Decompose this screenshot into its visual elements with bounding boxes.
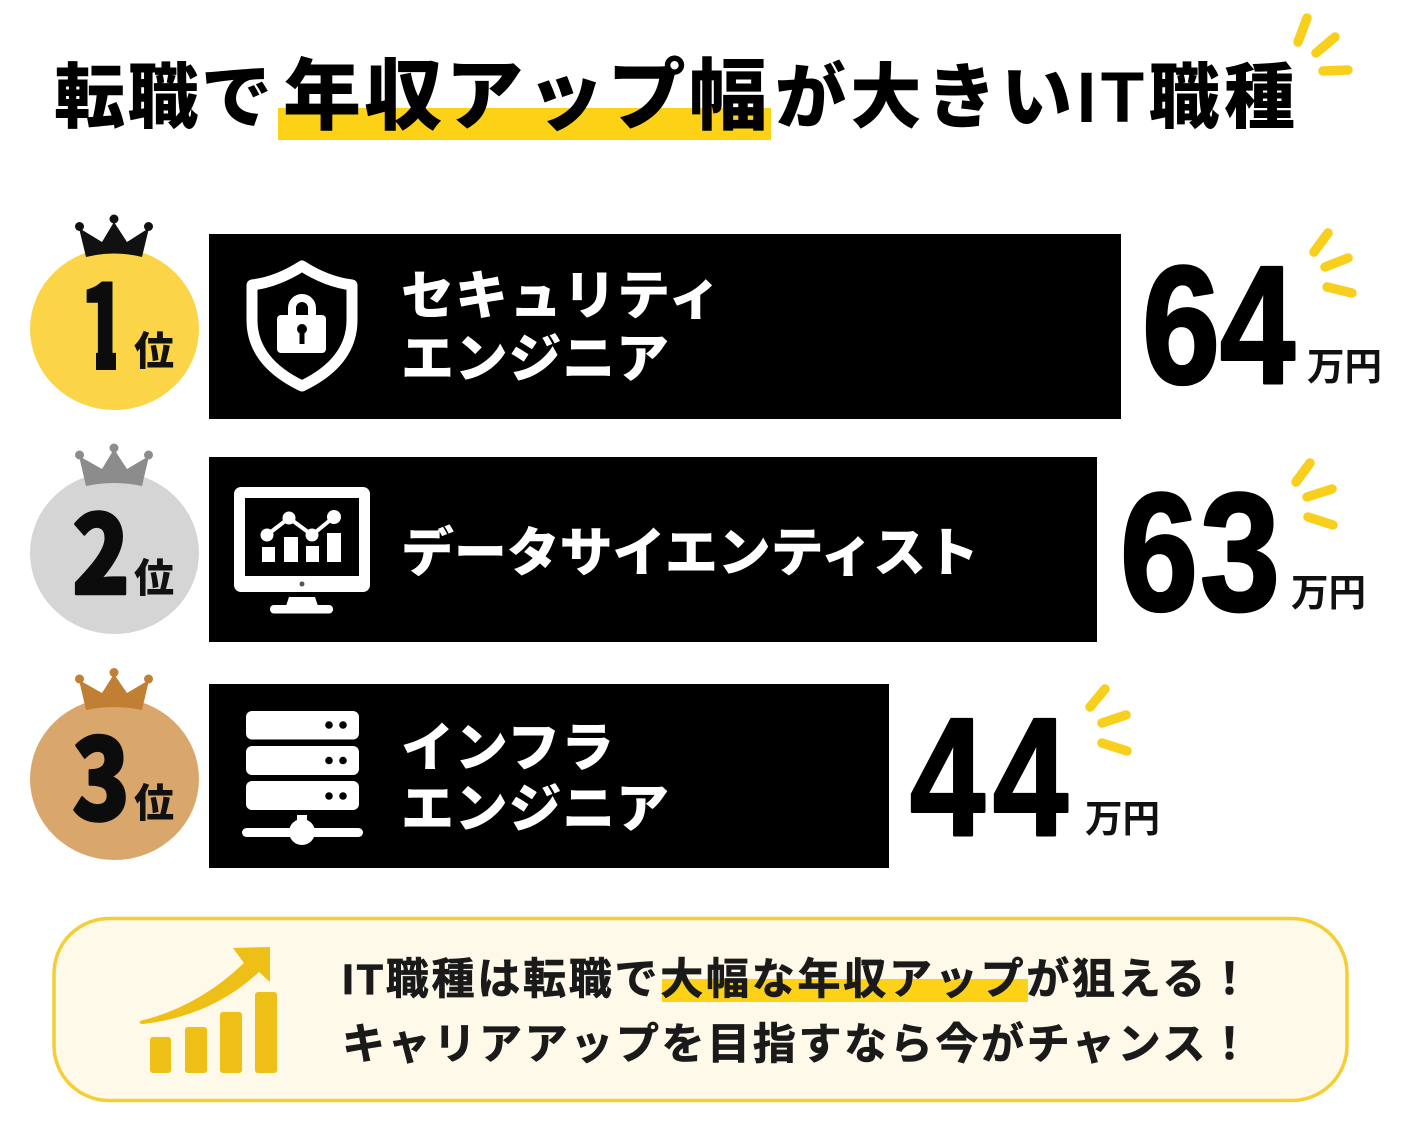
value: 64: 6 [1142,231,1220,419]
callout text [342,956,1251,1069]
rank suffix: 位 [134,330,174,374]
value: 64: 4 [1220,231,1295,419]
label: infrastructure engineer [401,719,669,839]
icon: server rack [242,711,363,845]
bar: data scientist [209,457,1097,642]
title highlight [278,108,771,140]
icon: title sparkle [1298,18,1348,71]
label: security engineer [401,267,721,389]
value: 63: 3 [1200,458,1280,646]
icon: silver crown [75,444,153,486]
rank number 2: 2 [72,469,130,626]
value: 44: 4 [910,683,985,871]
callout [54,918,1347,1100]
icon: black crown [75,214,153,257]
label: security engineer: エンジニア [401,330,669,389]
icon: sparkle [1296,463,1333,525]
value: 63: 万円 [1291,573,1366,615]
callout box [54,918,1347,1100]
value: 64 [1142,231,1382,419]
icon: sparkle [1090,689,1127,751]
label: data scientist: データサイエンティスト [401,523,979,583]
callout text: IT職種は転職で大幅な年収アップが狙える！ [342,956,1251,1004]
bar: security engineer [209,234,1121,419]
icon: shield with lock [252,266,352,386]
label: security engineer: セキュリティ [401,267,721,326]
title text: lead: 転職で [54,59,272,138]
callout highlight [662,979,1028,1002]
value: 44: 万円 [1085,799,1160,841]
rank 1 medal [30,214,199,410]
panel: rank 1 [30,214,1382,419]
title text: emphasis: 年収アップ幅 [283,52,767,140]
callout text: キャリアアップを目指すなら今がチャンス！ [342,1021,1251,1069]
rank 2 medal [30,444,199,634]
panel: rank 2 [30,444,1366,646]
label: infrastructure engineer: インフラ [401,719,614,778]
rank 3 medal [30,668,199,860]
icon: monitor with chart [234,487,370,614]
value: 44: 4 [993,683,1068,871]
value: 63: 6 [1120,458,1198,646]
rank number 3: 3 [72,691,130,853]
bar: infrastructure engineer [209,684,889,868]
rank number 1: 1 [78,233,128,405]
rank suffix: 位 [134,557,174,601]
value: 44 [910,683,1160,871]
rank suffix: 位 [134,782,174,826]
icon: sparkle [1314,233,1352,293]
value: 63 [1120,458,1366,646]
title text: tail: が大きいIT職種 [775,59,1295,138]
value: 64: 万円 [1307,347,1382,389]
panel: rank 3 [30,668,1160,871]
label: infrastructure engineer: エンジニア [401,780,669,839]
icon: rising bar chart [140,947,277,1073]
title [54,52,1295,140]
icon: bronze crown [75,668,153,710]
